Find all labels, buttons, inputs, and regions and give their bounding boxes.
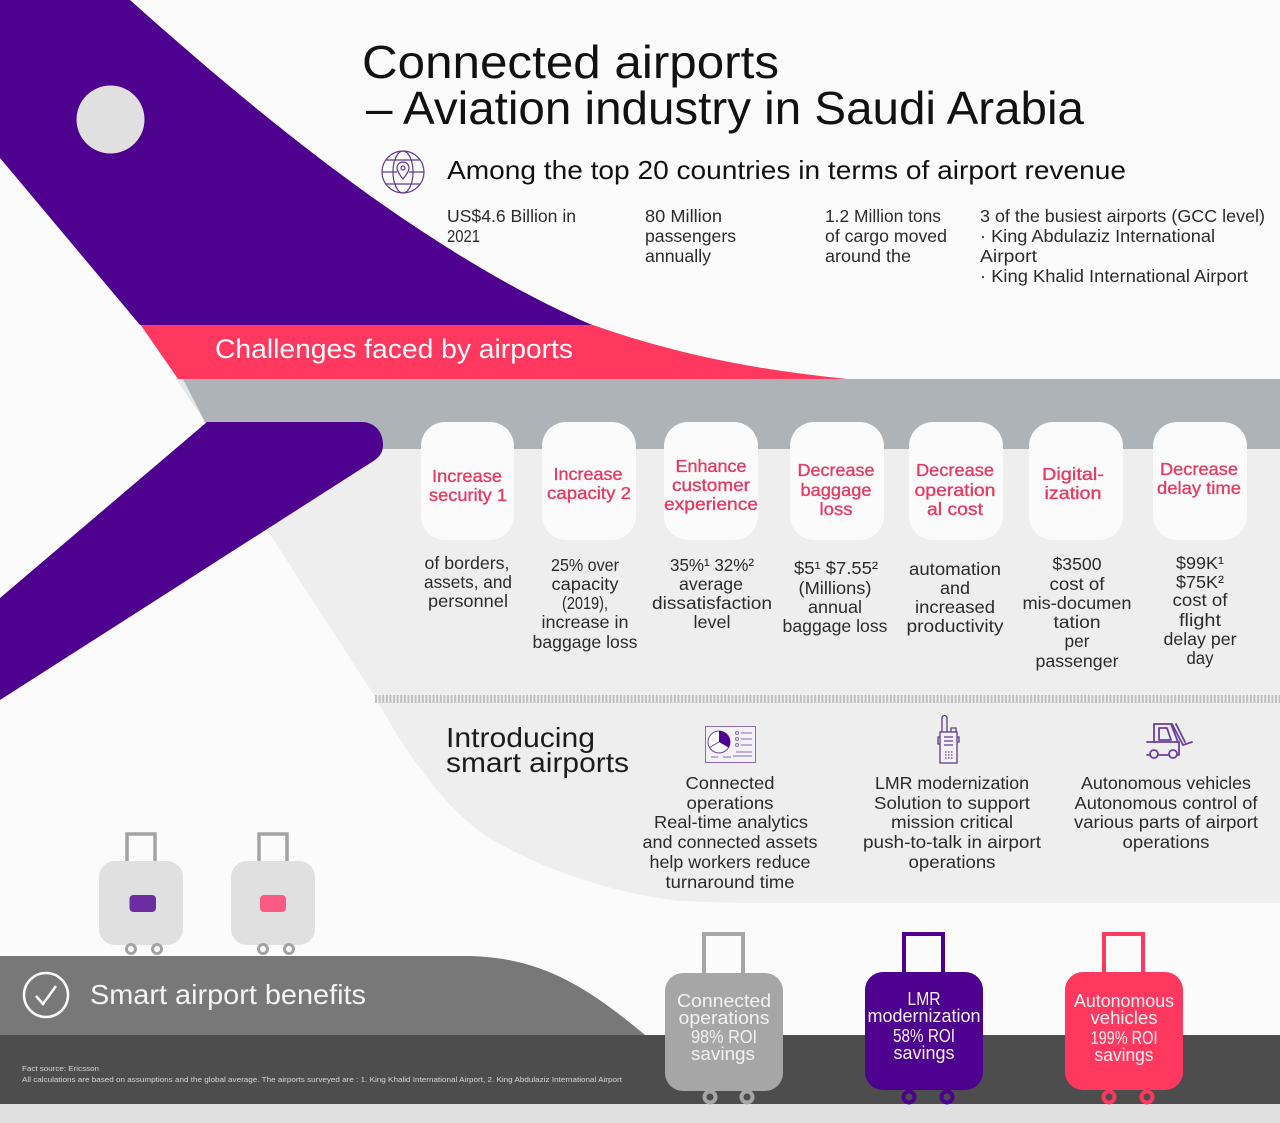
solution: autonomous vehicles bbox=[1074, 773, 1258, 852]
stat: cargo: of cargo moved bbox=[825, 226, 947, 246]
title: – Aviation industry in Saudi Arabia bbox=[366, 82, 1084, 134]
heading: introducing smart airports bbox=[446, 722, 629, 778]
challenge 3: customer experience: experience bbox=[664, 494, 758, 514]
challenge 7: delay time: $99K¹ bbox=[1176, 553, 1224, 573]
challenge 6: digitalization: cost of bbox=[1050, 574, 1105, 594]
solution: LMR modernization: Solution to support bbox=[874, 793, 1030, 813]
footnote bbox=[22, 1064, 623, 1084]
purple tail wing bbox=[0, 0, 592, 325]
challenge 5: operational cost: Decrease bbox=[916, 460, 994, 480]
suitcase: autonomous vehicles ROI bbox=[1065, 934, 1183, 1102]
small suitcase: purple tag bbox=[99, 834, 183, 954]
solution: LMR modernization: mission critical bbox=[891, 812, 1013, 832]
subheading: Among the top 20 countries in terms of airport revenue bbox=[447, 155, 1126, 185]
stat: revenue: 2021 bbox=[447, 226, 480, 246]
challenge 1: security: Increase bbox=[432, 466, 502, 486]
heading: introducing smart airports: Introducing bbox=[446, 722, 595, 753]
challenge 6: digitalization: ization bbox=[1044, 483, 1102, 503]
challenge 7: delay time: delay time bbox=[1157, 478, 1241, 498]
tail circle bbox=[76, 86, 144, 154]
benefits banner shape bbox=[0, 956, 645, 1035]
stat: busiest airports bbox=[980, 206, 1265, 286]
solution: autonomous vehicles: operations bbox=[1122, 832, 1210, 852]
stat: passengers: 80 Million bbox=[645, 206, 722, 226]
challenge 4: baggage loss: (Millions) bbox=[798, 578, 872, 598]
suitcase: connected operations ROI: operations bbox=[678, 1007, 770, 1028]
icon: globe with pin bbox=[382, 151, 424, 193]
suitcase: LMR modernization ROI: 58% ROI bbox=[893, 1025, 955, 1046]
solution: autonomous vehicles: various parts of airport bbox=[1074, 812, 1258, 832]
challenge 1: security: assets, and bbox=[424, 572, 512, 592]
stat: passengers: passengers bbox=[645, 226, 736, 246]
light grey fuselage panel bbox=[215, 449, 1280, 903]
suitcase: LMR modernization ROI bbox=[865, 934, 983, 1102]
challenge 3: customer experience: average bbox=[679, 574, 743, 594]
icon: check circle bbox=[24, 973, 68, 1017]
challenge 6: digitalization: tation bbox=[1054, 612, 1100, 632]
solution: connected operations: operations bbox=[686, 793, 774, 813]
title bbox=[362, 36, 1084, 134]
challenge 2: capacity: (2019), bbox=[562, 593, 608, 613]
solution: LMR modernization: operations bbox=[908, 852, 996, 872]
challenge 4: baggage loss: $5¹ $7.55² bbox=[794, 558, 878, 578]
suitcase: LMR modernization ROI: LMR bbox=[908, 988, 940, 1009]
suitcase: autonomous vehicles ROI: vehicles bbox=[1090, 1007, 1158, 1028]
solution: autonomous vehicles: Autonomous control of bbox=[1074, 793, 1258, 813]
small suitcase: pink tag bbox=[231, 834, 315, 954]
stat: passengers: annually bbox=[645, 246, 711, 266]
band shadow sliver bbox=[176, 379, 206, 423]
grey band bbox=[183, 379, 1280, 449]
footnote: Fact source: Ericsson bbox=[22, 1064, 99, 1073]
heading: smart airport benefits: Smart airport benefits bbox=[90, 979, 366, 1010]
challenge 2: capacity: Increase bbox=[554, 464, 622, 484]
challenge 6: digitalization: Digital- bbox=[1042, 464, 1104, 484]
stat: cargo bbox=[825, 206, 947, 266]
challenge 5: operational cost: and bbox=[940, 578, 970, 598]
stat: busiest airports: · King Abdulaziz International bbox=[980, 226, 1215, 246]
challenge 7: delay time: delay per bbox=[1164, 629, 1237, 649]
challenge 6: digitalization bbox=[1022, 422, 1132, 671]
challenge 7: delay time: cost of bbox=[1172, 590, 1228, 610]
challenge 5: operational cost bbox=[906, 422, 1004, 636]
challenge 1: security bbox=[421, 422, 514, 611]
suitcase: LMR modernization ROI: modernization bbox=[868, 1005, 980, 1026]
challenge 3: customer experience: dissatisfaction bbox=[652, 593, 772, 613]
challenge 7: delay time: flight bbox=[1179, 610, 1221, 630]
challenge 6: digitalization: passenger bbox=[1036, 651, 1119, 671]
challenge 5: operational cost: al cost bbox=[927, 499, 983, 519]
solution: LMR modernization: push-to-talk in airport bbox=[863, 832, 1041, 852]
stat: revenue bbox=[447, 206, 576, 246]
suitcase: autonomous vehicles ROI: savings bbox=[1094, 1044, 1154, 1065]
challenge 3: customer experience: 35%¹ 32%² bbox=[670, 555, 754, 575]
solution: connected operations: help workers reduce bbox=[650, 852, 810, 872]
solution: autonomous vehicles: Autonomous vehicles bbox=[1081, 773, 1251, 793]
stat: busiest airports: 3 of the busiest airports (GCC level) bbox=[980, 206, 1265, 226]
solution: connected operations bbox=[642, 773, 818, 892]
dark footer band bbox=[0, 1035, 1280, 1104]
suitcase: connected operations ROI: savings bbox=[691, 1043, 755, 1064]
challenge 5: operational cost: productivity bbox=[906, 616, 1004, 636]
bottom strip bbox=[0, 1104, 1280, 1123]
challenge 6: digitalization: per bbox=[1064, 631, 1090, 651]
challenge 1: security: of borders, bbox=[424, 553, 510, 573]
solution: LMR modernization: LMR modernization bbox=[875, 773, 1029, 793]
heading: introducing smart airports: smart airports bbox=[446, 747, 629, 778]
challenge 4: baggage loss: annual bbox=[808, 597, 862, 617]
challenge 6: digitalization: $3500 bbox=[1052, 554, 1102, 574]
challenge 5: operational cost: increased bbox=[915, 597, 995, 617]
suitcase: connected operations ROI: 98% ROI bbox=[691, 1026, 757, 1047]
icon: forklift bbox=[1147, 724, 1192, 758]
challenge 5: operational cost: operation bbox=[914, 480, 996, 500]
challenge 4: baggage loss: baggage loss bbox=[782, 616, 888, 636]
icon: dashboard bbox=[706, 726, 756, 762]
title: Connected airports bbox=[362, 36, 779, 88]
purple lower wing bbox=[0, 422, 383, 700]
challenge 3: customer experience bbox=[652, 422, 772, 632]
challenge 4: baggage loss bbox=[782, 422, 888, 636]
solution: connected operations: turnaround time bbox=[666, 872, 794, 892]
challenge 7: delay time: $75K² bbox=[1176, 572, 1224, 592]
challenge 3: customer experience: customer bbox=[672, 475, 750, 495]
stat: passengers bbox=[645, 206, 736, 266]
suitcase: connected operations ROI bbox=[665, 934, 783, 1102]
challenge 2: capacity: increase in bbox=[542, 612, 628, 632]
solution: LMR modernization bbox=[863, 773, 1041, 872]
challenge 7: delay time bbox=[1153, 422, 1247, 668]
challenge 3: customer experience: Enhance bbox=[676, 456, 746, 476]
challenge 2: capacity: capacity bbox=[552, 574, 619, 594]
suitcase: LMR modernization ROI: savings bbox=[894, 1042, 954, 1063]
suitcase: autonomous vehicles ROI: Autonomous bbox=[1074, 990, 1174, 1011]
footnote: All calculations are based on assumptions and the global average. The airports surveyed are : 1. King Khalid International Airport, 2. King Abdulaziz International Airport bbox=[22, 1075, 623, 1084]
suitcase: connected operations ROI: Connected bbox=[677, 990, 771, 1011]
solution: connected operations: Real-time analytics bbox=[654, 812, 808, 832]
stat: cargo: around the bbox=[825, 246, 911, 266]
challenge 4: baggage loss: loss bbox=[820, 499, 853, 519]
challenge 2: capacity: baggage loss bbox=[532, 632, 638, 652]
challenge 2: capacity: capacity 2 bbox=[547, 483, 631, 503]
suitcase: autonomous vehicles ROI: 199% ROI bbox=[1090, 1027, 1158, 1048]
challenge 2: capacity: 25% over bbox=[551, 555, 619, 575]
solution: connected operations: and connected assets bbox=[642, 832, 818, 852]
stat: cargo: 1.2 Million tons bbox=[825, 206, 941, 226]
challenge 4: baggage loss: Decrease bbox=[798, 460, 874, 480]
heading: challenges: Challenges faced by airports bbox=[215, 334, 573, 364]
challenge 1: security: security 1 bbox=[429, 485, 507, 505]
challenge 7: delay time: day bbox=[1186, 648, 1214, 668]
stat: busiest airports: Airport bbox=[980, 246, 1037, 266]
challenge 2: capacity bbox=[532, 422, 638, 652]
icon: radio bbox=[938, 716, 959, 763]
challenge 4: baggage loss: baggage bbox=[800, 480, 872, 500]
solution: connected operations: Connected bbox=[686, 773, 774, 793]
stat: revenue: US$4.6 Billion in bbox=[447, 206, 576, 226]
challenge 6: digitalization: mis-documen bbox=[1022, 593, 1132, 613]
challenge 3: customer experience: level bbox=[694, 612, 730, 632]
challenge 5: operational cost: automation bbox=[909, 559, 1001, 579]
challenge 1: security: personnel bbox=[428, 591, 508, 611]
pink banner: challenges bbox=[140, 324, 847, 379]
stat: busiest airports: · King Khalid International Airport bbox=[980, 266, 1248, 286]
challenge 7: delay time: Decrease bbox=[1160, 459, 1238, 479]
